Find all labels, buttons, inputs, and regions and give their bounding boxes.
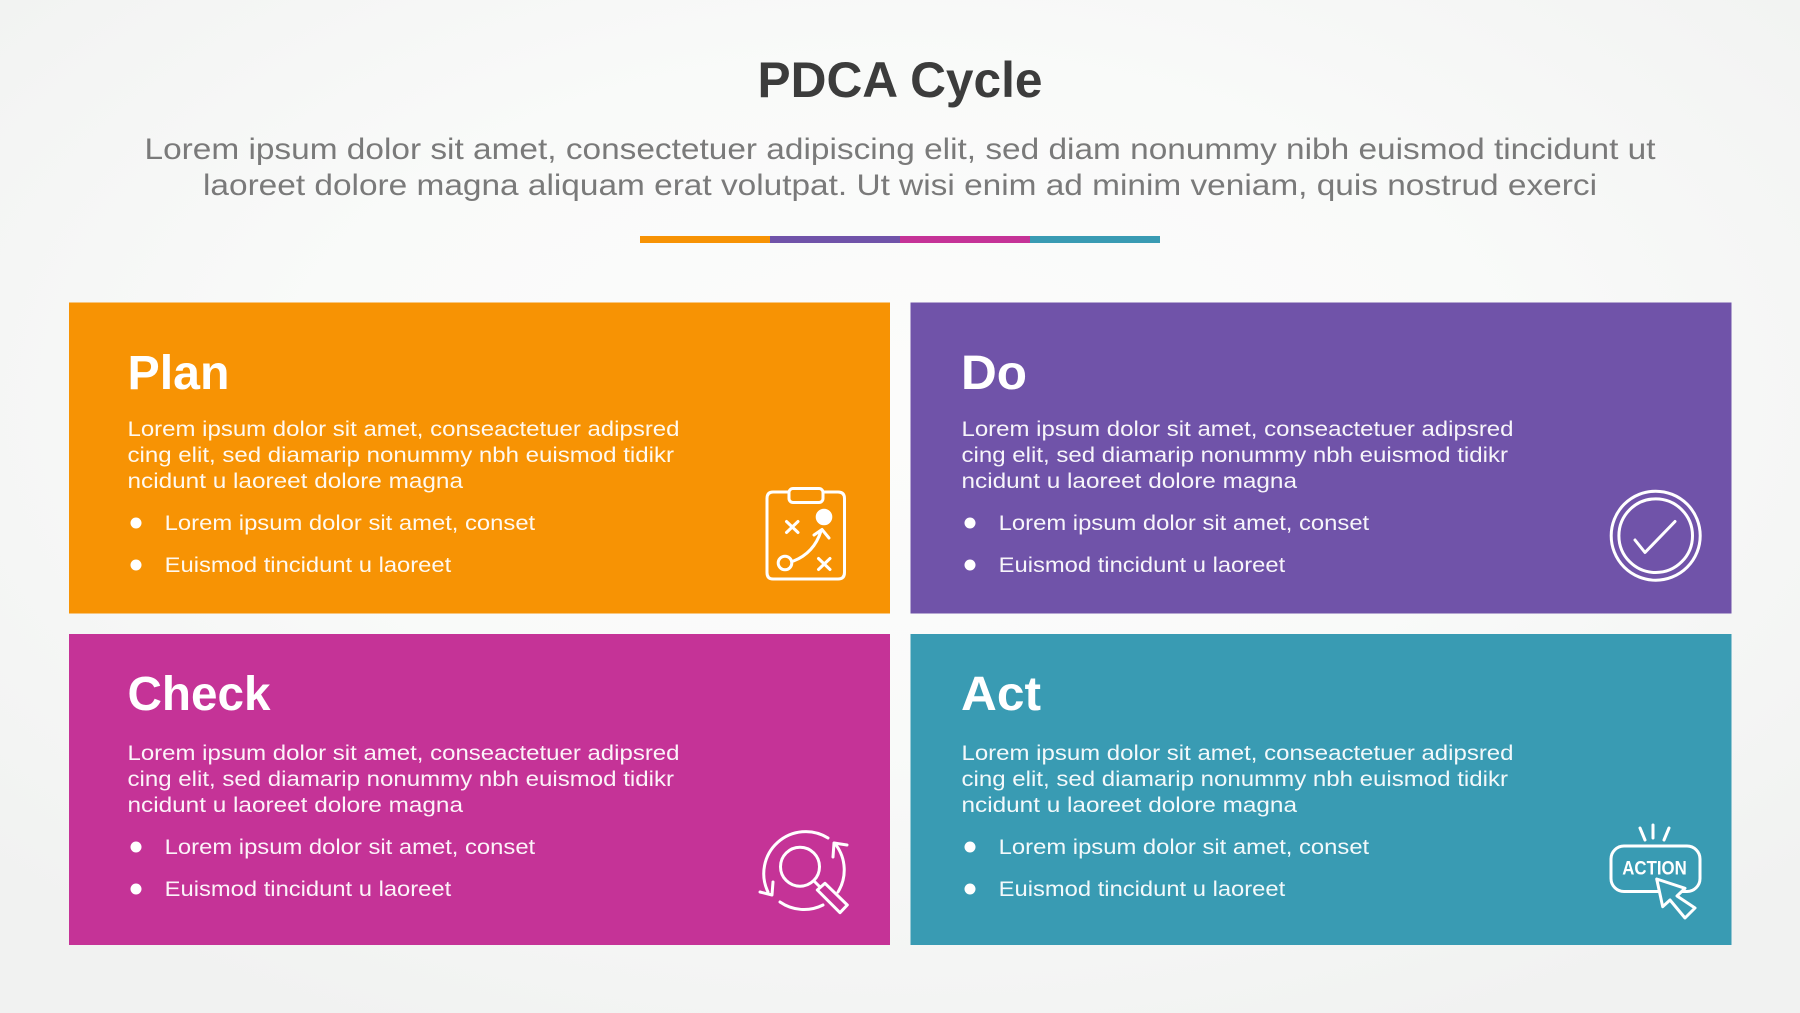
bullet list: Plan bbox=[130, 512, 535, 577]
panel: Plan bbox=[69, 302, 890, 614]
bullet list: Act: Lorem ipsum dolor sit amet, conset bbox=[999, 836, 1369, 859]
text block: Act description: Lorem ipsum dolor sit amet, conseactetuer adipsred bbox=[962, 742, 1514, 765]
text block: Plan description: cing elit, sed diamarip nonummy nbh euismod tidikr bbox=[128, 444, 674, 467]
text block: Do description bbox=[962, 418, 1514, 493]
bullet list: Plan: Euismod tincidunt u laoreet bbox=[165, 554, 451, 577]
heading: Act: Act bbox=[961, 668, 1041, 721]
text block: Act description: ncidunt u laoreet dolore magna bbox=[962, 794, 1297, 817]
bullet list: Act bbox=[964, 836, 1369, 901]
text block: Check description: ncidunt u laoreet dolore magna bbox=[128, 794, 463, 817]
icon: clipboard strategy bbox=[767, 488, 844, 579]
text block: Plan description bbox=[128, 418, 680, 493]
icon: action button with cursor bbox=[1611, 825, 1700, 918]
text block: Check description bbox=[128, 742, 680, 817]
text block: Do description: cing elit, sed diamarip nonummy nbh euismod tidikr bbox=[962, 444, 1508, 467]
title: PDCA Cycle bbox=[758, 52, 1042, 108]
icon: check mark circle bbox=[1611, 491, 1700, 580]
panel: Do bbox=[910, 302, 1732, 614]
bullet list: Do bbox=[964, 512, 1369, 577]
bullet list: Do: Lorem ipsum dolor sit amet, conset bbox=[999, 512, 1369, 535]
heading: Do: Do bbox=[961, 347, 1027, 400]
text block: Do description: ncidunt u laoreet dolore magna bbox=[962, 470, 1297, 493]
subtitle text block: laoreet dolore magna aliquam erat volutpat. Ut wisi enim ad minim veniam, quis nostrud exerci bbox=[203, 169, 1597, 202]
text block: Check description: cing elit, sed diamarip nonummy nbh euismod tidikr bbox=[128, 768, 674, 791]
icon: action button with cursor: ACTION bbox=[1622, 858, 1687, 879]
text block: Act description bbox=[962, 742, 1514, 817]
icon: magnifier with cycle arrows bbox=[760, 832, 847, 913]
bullet list: Plan: Lorem ipsum dolor sit amet, conset bbox=[165, 512, 535, 535]
bullet list: Check: Lorem ipsum dolor sit amet, conset bbox=[165, 836, 535, 859]
bullet list: Check bbox=[130, 836, 535, 901]
colour divider bar bbox=[640, 236, 1160, 243]
text block: Plan description: Lorem ipsum dolor sit amet, conseactetuer adipsred bbox=[128, 418, 680, 441]
heading: Plan: Plan bbox=[128, 347, 230, 400]
bullet list: Check: Euismod tincidunt u laoreet bbox=[165, 878, 451, 901]
text block: Do description: Lorem ipsum dolor sit amet, conseactetuer adipsred bbox=[962, 418, 1514, 441]
subtitle text block: Lorem ipsum dolor sit amet, consectetuer adipiscing elit, sed diam nonummy nibh euismod tincidunt ut bbox=[144, 133, 1656, 166]
panel: Check bbox=[69, 634, 890, 945]
text block: Act description: cing elit, sed diamarip nonummy nbh euismod tidikr bbox=[962, 768, 1508, 791]
subtitle text block bbox=[144, 133, 1656, 202]
heading: Check: Check bbox=[128, 668, 271, 721]
bullet list: Do: Euismod tincidunt u laoreet bbox=[999, 554, 1285, 577]
text block: Plan description: ncidunt u laoreet dolore magna bbox=[128, 470, 463, 493]
panel: Act bbox=[910, 634, 1732, 945]
bullet list: Act: Euismod tincidunt u laoreet bbox=[999, 878, 1285, 901]
text block: Check description: Lorem ipsum dolor sit amet, conseactetuer adipsred bbox=[128, 742, 680, 765]
